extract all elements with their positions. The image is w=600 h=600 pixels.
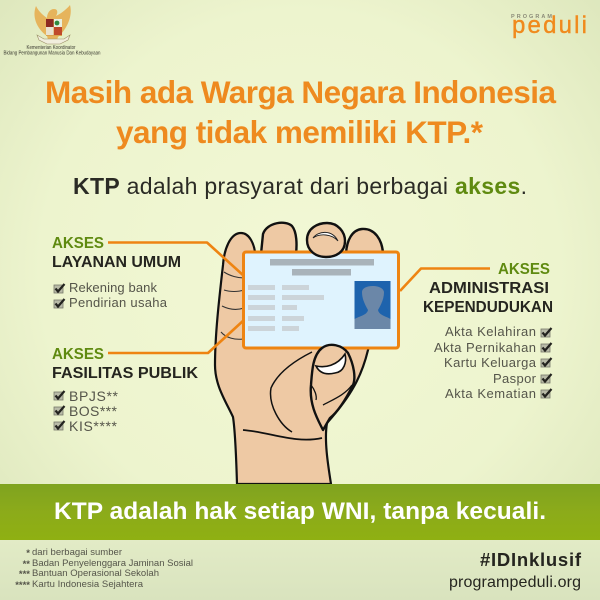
title: yang tidak memiliki KTP.* (116, 114, 484, 150)
fingers (261, 223, 297, 254)
palm creases (221, 272, 244, 339)
panel: akses layanan umum (52, 235, 181, 310)
photo (354, 281, 390, 329)
logo: Program Peduli: peduli (512, 12, 587, 39)
panel: akses administrasi kependudukan: Akta Kematian (445, 386, 536, 401)
icon: garuda emblem (34, 5, 71, 44)
ministry name: Kementerian Koordinator (26, 45, 76, 51)
banner: KTP adalah hak setiap WNI, tanpa kecuali. (54, 498, 546, 525)
hashtag and website: programpeduli.org (449, 574, 581, 591)
panel: akses layanan umum: AKSES (52, 235, 104, 252)
panel: akses administrasi kependudukan: Kartu Keluarga (444, 355, 537, 370)
panel: akses fasilitas publik: KIS**** (69, 418, 118, 434)
government emblem and ministry name: Bidang Pembangunan Manusia Dan Kebudayaan (4, 50, 101, 56)
panel: akses administrasi kependudukan: AKSES (498, 261, 550, 278)
hand palm and wrist (215, 233, 385, 484)
panel: akses layanan umum: LAYANAN UMUM (52, 254, 181, 271)
ID card (244, 252, 398, 348)
thumb over card (311, 345, 354, 430)
footnotes: Kartu Indonesia Sejahtera (32, 579, 144, 590)
footnotes: * (26, 548, 30, 559)
middle finger over card (307, 223, 345, 257)
panel: akses administrasi kependudukan: KEPENDUDUKAN (423, 299, 553, 316)
footnotes: Badan Penyelenggara Jaminan Sosial (32, 558, 193, 569)
footnotes (15, 547, 193, 591)
panel: akses administrasi kependudukan (423, 261, 553, 401)
connector lines (108, 242, 490, 353)
subtitle: KTP adalah prasyarat dari berbagai akses. (73, 173, 527, 199)
footnotes: dari berbagai sumber (32, 547, 122, 558)
title (45, 74, 556, 150)
footnotes: *** (19, 569, 30, 580)
panel: akses layanan umum: Pendirian usaha (69, 295, 168, 310)
panel: akses fasilitas publik: BPJS** (69, 388, 119, 404)
panel: akses administrasi kependudukan: Akta Pernikahan (434, 340, 536, 355)
footnotes: **** (15, 580, 30, 591)
footnotes: ** (23, 559, 30, 570)
footer background (0, 540, 600, 600)
hashtag and website (449, 549, 582, 591)
title: Masih ada Warga Negara Indonesia (45, 74, 556, 110)
hashtag and website: #IDInklusif (480, 549, 582, 570)
panel: akses layanan umum: Rekening bank (69, 280, 158, 295)
illustration: hand holding KTP card (215, 223, 398, 484)
panel: akses administrasi kependudukan: ADMINISTRASI (429, 280, 549, 297)
panel: akses fasilitas publik: AKSES (52, 346, 104, 363)
panel: akses administrasi kependudukan: Akta Kelahiran (445, 324, 536, 339)
panel: akses fasilitas publik: BOS*** (69, 403, 118, 419)
panel: akses fasilitas publik (52, 346, 199, 434)
logo: Program Peduli: PROGRAM (511, 14, 552, 20)
footnotes: Bantuan Operasional Sekolah (32, 568, 159, 579)
banner (0, 484, 600, 540)
panel: akses fasilitas publik: FASILITAS PUBLIK (52, 365, 199, 382)
panel: akses administrasi kependudukan: Paspor (493, 371, 537, 386)
government emblem and ministry name (4, 5, 101, 56)
